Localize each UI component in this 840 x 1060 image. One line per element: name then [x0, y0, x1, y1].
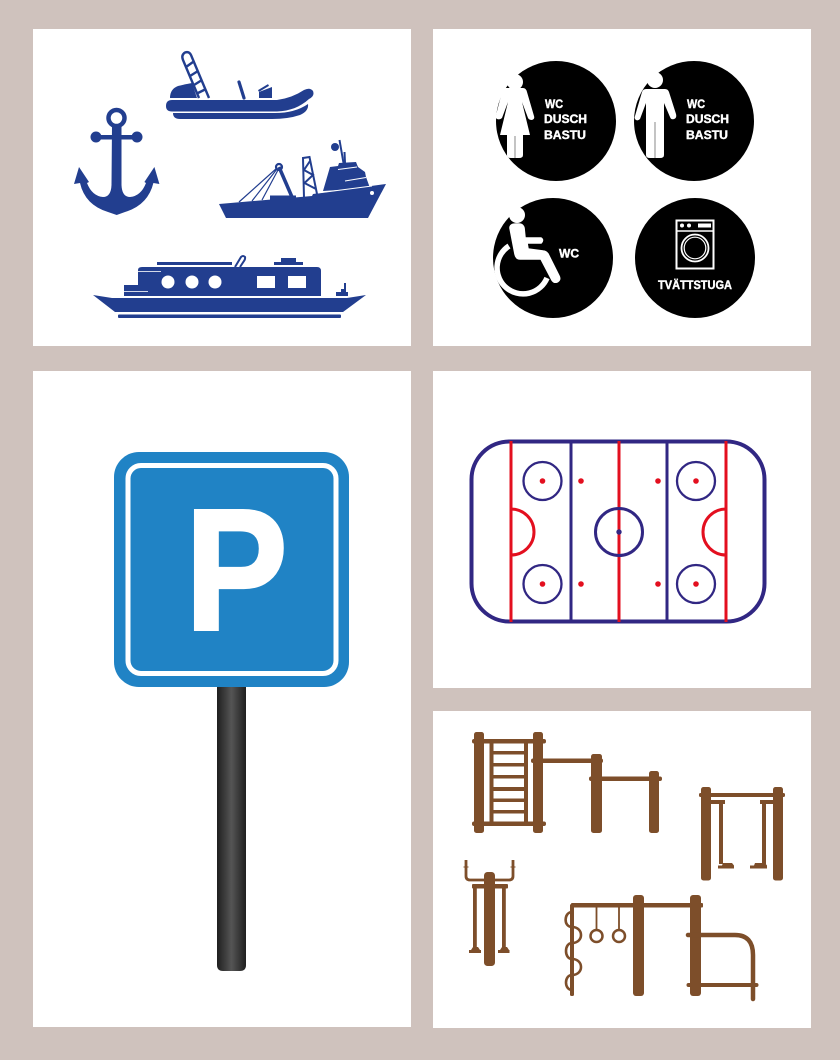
icon: ladder and pull-up bars: [472, 732, 662, 833]
icon: double exercise frame: [699, 787, 785, 880]
parking sign plate: [114, 452, 349, 687]
sign: laundry room: [635, 198, 755, 318]
text: WC DUSCH BASTU: BASTU: [544, 130, 586, 142]
icon: anchor: [74, 110, 159, 215]
text: WC DUSCH BASTU: [686, 99, 729, 142]
icon: rings and climbing frame: [566, 895, 756, 999]
panel: service signs: [433, 29, 811, 346]
text: TVÄTTSTUGA: TVÄTTSTUGA: [658, 279, 732, 292]
icon: washing machine: [676, 220, 714, 268]
sign: accessible wc: [493, 198, 613, 318]
icon: inflatable boat: [166, 52, 314, 119]
text: WC DUSCH BASTU: WC: [545, 99, 563, 111]
text: WC DUSCH BASTU: [544, 99, 587, 142]
sign pole: [217, 686, 246, 971]
panel: ice hockey rink: [433, 371, 811, 688]
text: WC DUSCH BASTU: BASTU: [686, 130, 728, 142]
panel: boats and anchor: [33, 29, 411, 346]
icon: wheelchair user: [497, 207, 560, 294]
icon: man: [635, 72, 676, 158]
icon: woman: [496, 74, 534, 158]
icon: single exercise station: [464, 860, 516, 966]
icon: ship with crane: [219, 140, 386, 218]
letter P: P: [185, 472, 288, 666]
panel: outdoor gym: [433, 711, 811, 1028]
text: WC DUSCH BASTU: DUSCH: [686, 114, 729, 126]
panel: parking sign: [33, 371, 411, 1027]
sign: men wc shower sauna: [634, 61, 754, 181]
sign: women wc shower sauna: [496, 61, 616, 181]
text: WC: WC: [559, 246, 579, 260]
text: WC DUSCH BASTU: WC: [687, 99, 705, 111]
text: WC DUSCH BASTU: DUSCH: [544, 114, 587, 126]
rink diagram: [472, 441, 764, 622]
icon: houseboat: [93, 256, 366, 318]
